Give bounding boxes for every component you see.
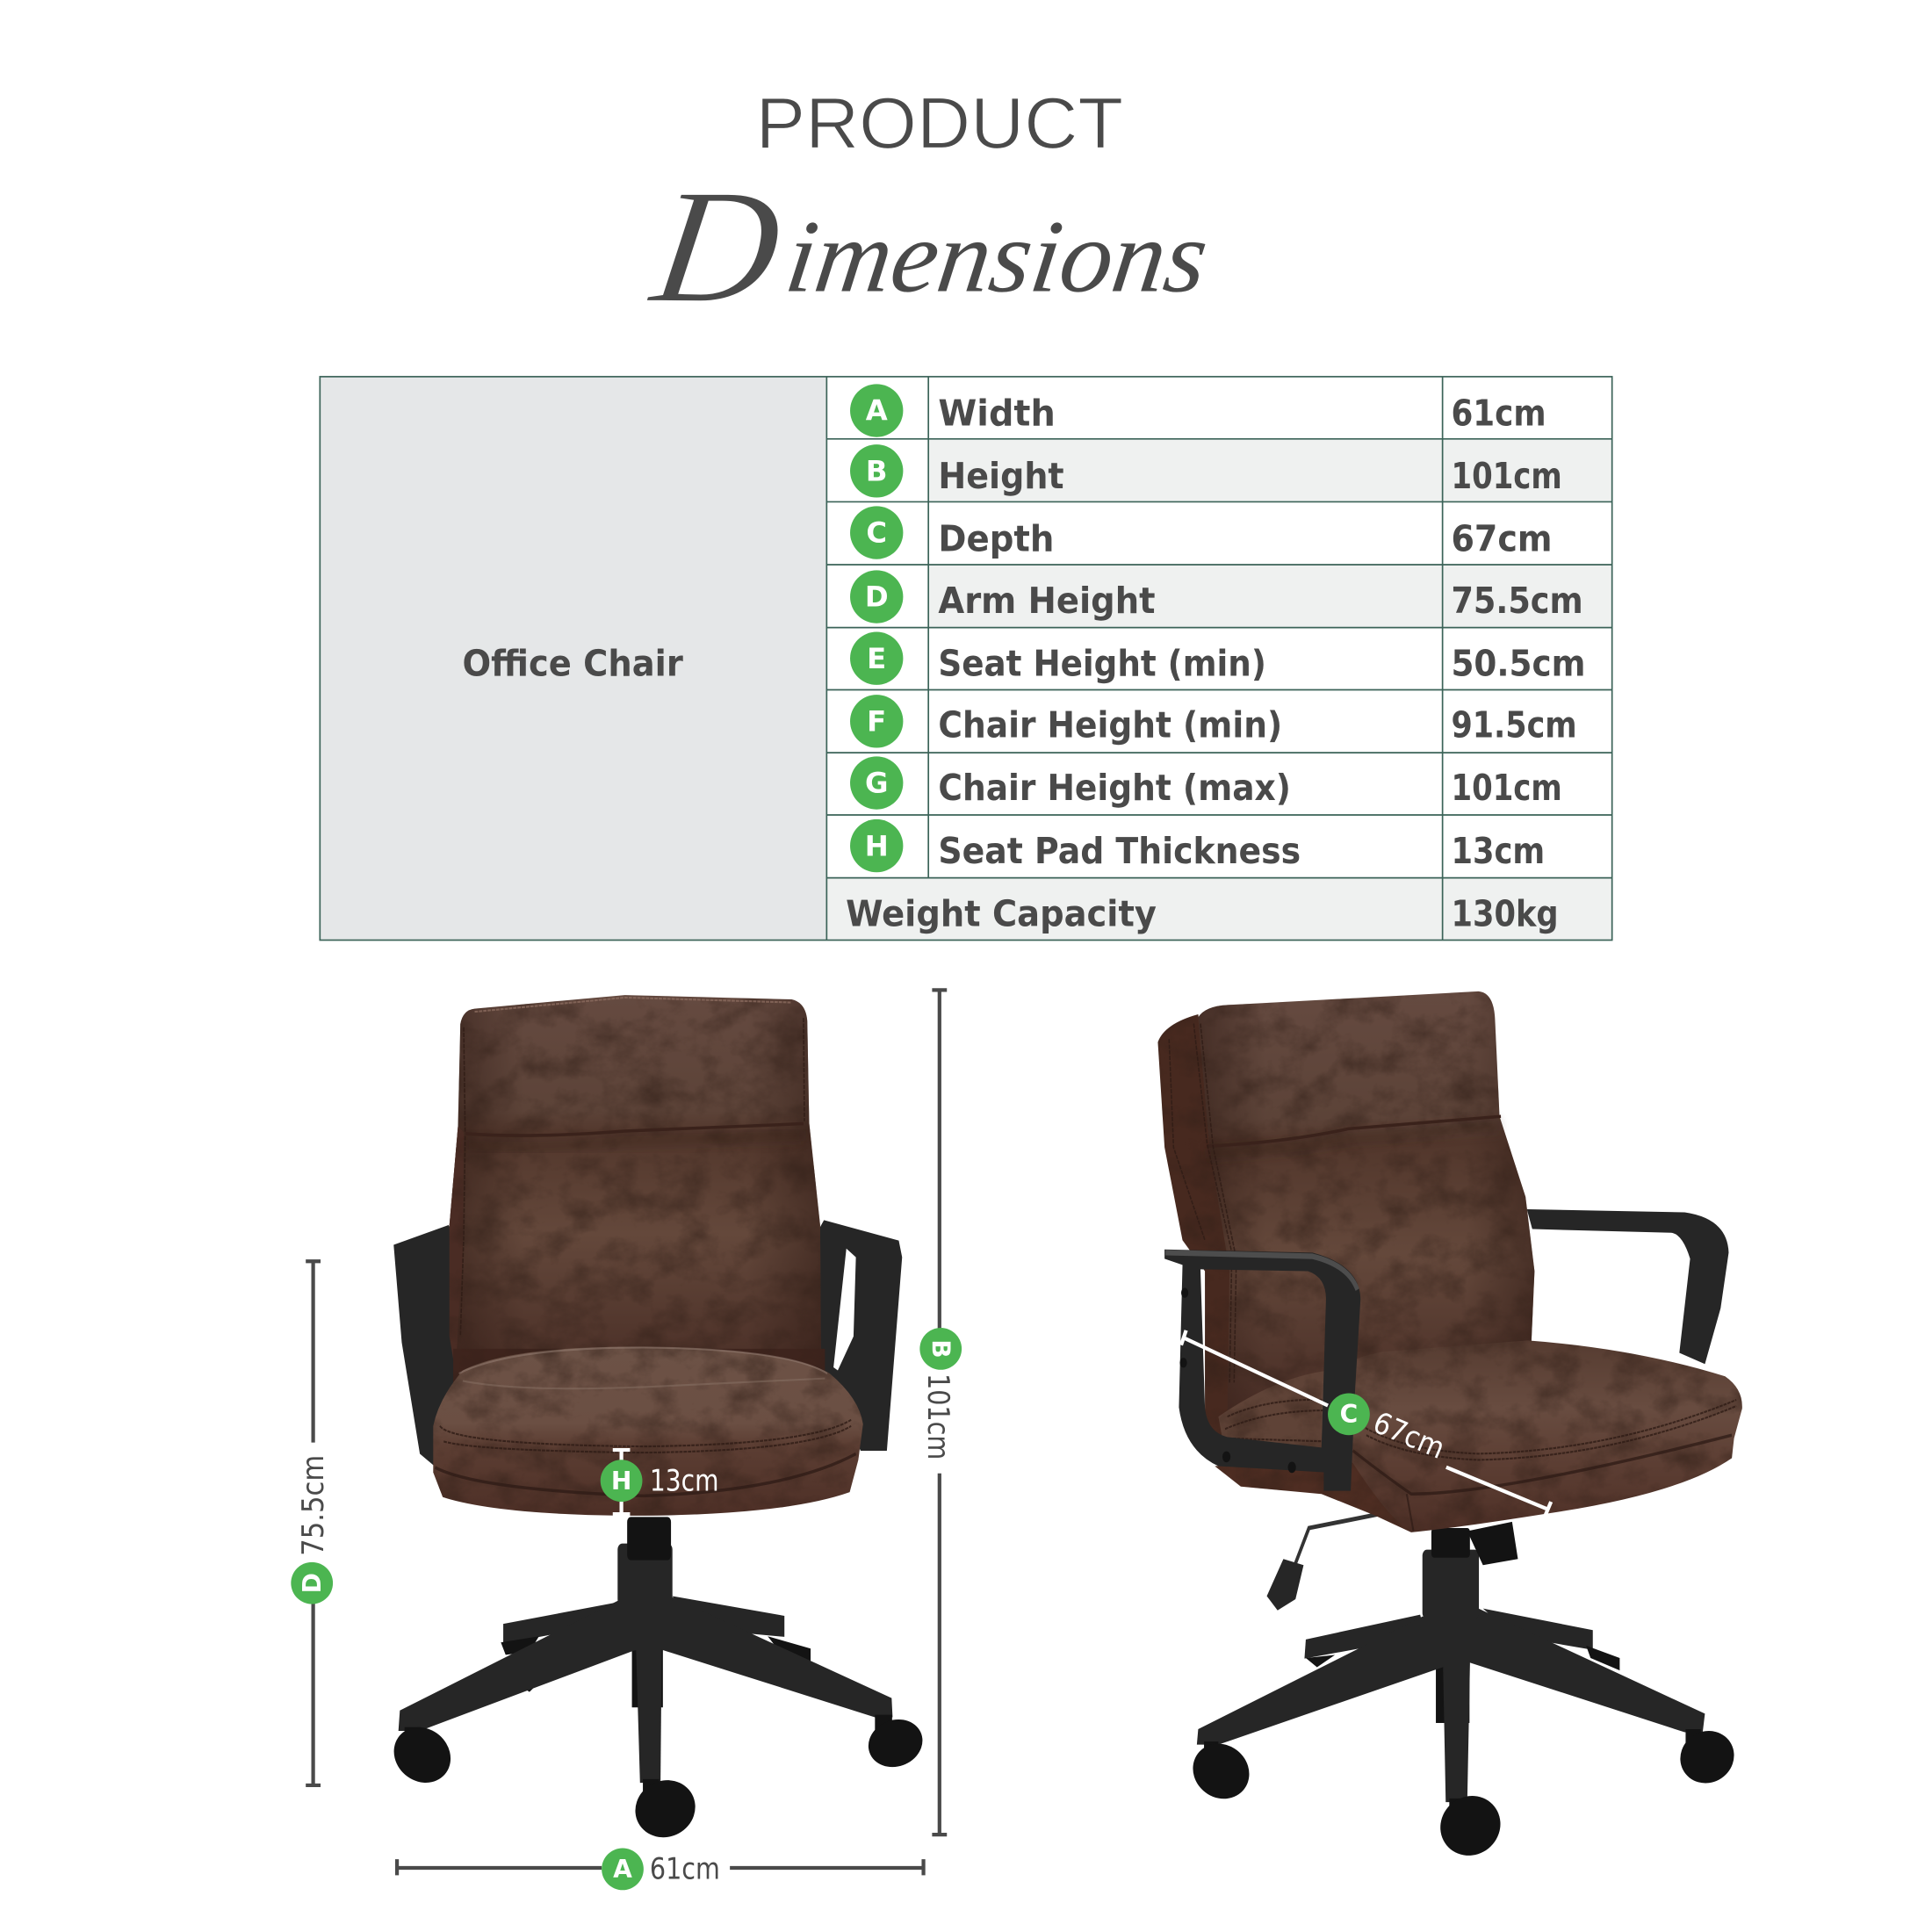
- dimension H: seat pad thickness: 13cm: [650, 1463, 719, 1497]
- dimension D: arm height: D: [298, 1573, 327, 1593]
- far armrest: [1527, 1209, 1728, 1364]
- base: [1190, 1522, 1735, 1859]
- row G: chair height max: G: [865, 767, 888, 800]
- casters: [390, 1715, 925, 1842]
- armrest screws: [1179, 1288, 1296, 1473]
- dimensions table: [320, 377, 1612, 941]
- row A: width: [850, 384, 1546, 437]
- row E: seat height min: Seat Height (min): [938, 642, 1266, 684]
- row B: height: 101cm: [1451, 455, 1562, 497]
- title line: Dimensions script: [640, 156, 1221, 336]
- row C: depth: [850, 506, 1553, 560]
- dimension H: seat pad thickness: H: [611, 1467, 631, 1496]
- row E: seat height min: 50.5cm: [1451, 642, 1585, 684]
- row C: depth: C: [866, 516, 887, 550]
- dimension C: depth: C: [1340, 1400, 1358, 1429]
- dimension A: width: 61cm: [650, 1852, 720, 1886]
- row A: width: 61cm: [1451, 392, 1546, 434]
- row C: depth: 67cm: [1451, 518, 1553, 560]
- side view chair: [1157, 991, 1742, 1859]
- row D: arm height: Arm Height: [938, 580, 1156, 622]
- table grid: [320, 377, 1612, 941]
- row F: chair height min: 91.5cm: [1451, 704, 1577, 746]
- dimension D: arm height: [291, 1261, 333, 1785]
- row A: width: A: [866, 394, 888, 428]
- front view chair: [390, 995, 925, 1842]
- product name cell: Office Chair: [462, 642, 683, 684]
- title: [640, 82, 1221, 336]
- row H: seat pad thickness: [850, 819, 1545, 872]
- row B: height: B: [866, 455, 888, 488]
- row D: arm height: 75.5cm: [1451, 580, 1583, 622]
- row: weight capacity: [846, 892, 1559, 934]
- product name cell: [320, 377, 826, 941]
- fabric stitching: [1169, 1024, 1736, 1531]
- dimension B: height: B: [926, 1339, 955, 1359]
- title line: PRODUCT: PRODUCT: [756, 82, 1123, 163]
- row F: chair height min: F: [867, 705, 886, 739]
- left armrest: [393, 1225, 463, 1465]
- row E: seat height min: E: [867, 642, 886, 675]
- near armrest: [1164, 1250, 1360, 1491]
- dimension A: width: [397, 1849, 924, 1890]
- row G: chair height max: [850, 756, 1562, 810]
- upholstered back and seat: [433, 995, 863, 1516]
- title line: Dimensions script: D: [640, 156, 792, 336]
- gas lever: [1267, 1514, 1378, 1611]
- row H: seat pad thickness: H: [865, 829, 889, 862]
- dimension C: depth: [1181, 1330, 1551, 1517]
- row A: width: Width: [938, 392, 1056, 434]
- row H: seat pad thickness: Seat Pad Thickness: [938, 830, 1301, 872]
- dimension A: width: A: [613, 1855, 632, 1884]
- title line: Dimensions script: imensions: [780, 198, 1215, 314]
- base: [390, 1517, 925, 1842]
- row H: seat pad thickness: 13cm: [1451, 830, 1545, 872]
- row G: chair height max: 101cm: [1451, 767, 1562, 809]
- dimension B: height: 101cm: [921, 1373, 955, 1460]
- fabric stitching: [435, 998, 856, 1496]
- row: weight capacity: 130kg: [1451, 892, 1559, 934]
- row F: chair height min: Chair Height (min): [938, 704, 1282, 746]
- shaded table rows: [826, 439, 1612, 941]
- row B: height: [850, 444, 1562, 497]
- armrest top highlight: [1165, 1252, 1358, 1290]
- casters: [1190, 1728, 1735, 1859]
- upholstered back and seat: [1157, 991, 1742, 1532]
- row C: depth: Depth: [938, 518, 1054, 560]
- row E: seat height min: [850, 632, 1585, 685]
- row D: arm height: [850, 570, 1583, 624]
- dimension H: seat pad thickness: [601, 1450, 719, 1514]
- dimension B: height: [919, 990, 962, 1835]
- dimension C: depth: 67cm: [1368, 1405, 1450, 1466]
- dimension D: arm height: 75.5cm: [296, 1455, 330, 1556]
- row D: arm height: D: [865, 580, 889, 614]
- row B: height: Height: [938, 455, 1064, 497]
- row F: chair height min: [850, 695, 1577, 747]
- right armrest: [818, 1220, 902, 1451]
- row G: chair height max: Chair Height (max): [938, 767, 1291, 809]
- seat highlight rim: [459, 1347, 827, 1373]
- row: weight capacity: Weight Capacity: [846, 892, 1157, 934]
